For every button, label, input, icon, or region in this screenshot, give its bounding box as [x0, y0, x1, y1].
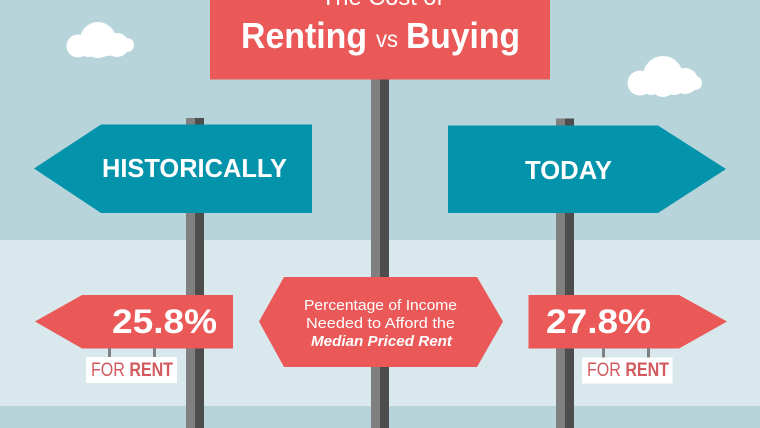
label: today: TODAY [525, 155, 612, 185]
sign: today arrow [448, 126, 726, 213]
label: historically: HISTORICALLY [102, 153, 287, 183]
sign: percentage of income description [259, 277, 503, 367]
icon: left cloud [66, 22, 134, 58]
title: second line [241, 15, 520, 56]
title: second line: vs [376, 26, 398, 52]
for rent tag: right: FOR RENT [587, 360, 669, 381]
for rent tag: left [86, 348, 177, 383]
description text: Median Priced Rent [311, 333, 453, 350]
description text: Needed to Afford the [306, 315, 455, 332]
description text [304, 297, 457, 350]
left signpost pole [186, 118, 204, 428]
title: second line: Buying [406, 15, 520, 56]
title sign [210, 0, 550, 80]
value: 27.8%: 27.8% [546, 303, 651, 341]
description text: Percentage of Income [304, 297, 457, 314]
sign: historical rent percentage [35, 295, 233, 348]
right signpost pole [556, 118, 574, 428]
center signpost pole [371, 70, 389, 428]
value: 25.8%: 25.8% [112, 303, 217, 341]
sign: today rent percentage [528, 295, 727, 348]
title: second line: Renting [241, 15, 367, 56]
icon: right cloud [628, 56, 702, 97]
sign: historically arrow [34, 124, 312, 213]
for rent tag: right [582, 348, 672, 384]
for rent tag: left: FOR RENT [91, 360, 173, 381]
